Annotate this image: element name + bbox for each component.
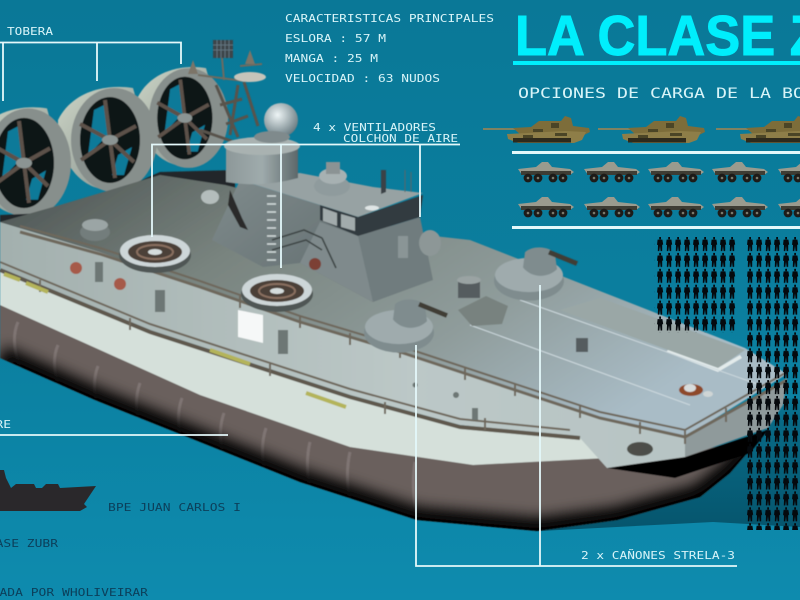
- white hull panel: [238, 310, 263, 343]
- callout: ventiladores: COLCHON DE AIRE: [343, 132, 458, 145]
- cargo: APC rows: [518, 162, 800, 217]
- deck air vents: [119, 235, 191, 273]
- upper drum: [226, 148, 298, 184]
- bridge body: [355, 217, 433, 302]
- bridge windows: [320, 195, 423, 236]
- raised bow deck panel: [560, 298, 745, 368]
- title underline: [513, 61, 800, 65]
- tower block side: [212, 180, 373, 302]
- label: BPE Juan Carlos I: BPE JUAN CARLOS I: [108, 501, 241, 514]
- main characteristics text: CARACTERISTICAS PRINCIPALES: [285, 12, 494, 25]
- deck marking lines: [470, 300, 760, 405]
- drum collar: [224, 137, 300, 155]
- ship shadow on water: [480, 395, 800, 531]
- radar dome: [264, 103, 298, 137]
- hull hatches and details: [70, 262, 478, 420]
- small rear cylinders: [80, 190, 219, 241]
- superstructure: [212, 103, 441, 302]
- callout: cañones: [416, 285, 737, 566]
- callout: ventiladores: 4 x VENTILADORES: [313, 121, 436, 134]
- callout: tobera: TOBERA: [7, 25, 53, 38]
- deck cylinder: [576, 338, 588, 352]
- forward turrets: [364, 299, 447, 353]
- bridge top plate: [240, 173, 423, 217]
- vent behind bridge: [419, 230, 441, 256]
- cargo: tanks row: [483, 116, 800, 143]
- soldiers silhouettes: [654, 237, 800, 530]
- main characteristics text: ESLORA : 57 M: [285, 32, 386, 45]
- callout: ventiladores: [152, 121, 460, 268]
- yellow tubes on hull: [4, 274, 346, 407]
- bridge side box: [398, 236, 408, 258]
- lower white band: [0, 268, 607, 465]
- mast and radar: [188, 40, 266, 144]
- dark rear deck: [0, 170, 235, 290]
- life raft: [679, 384, 713, 397]
- callout: cañones: 2 x CAÑONES STRELA-3: [581, 549, 735, 562]
- cargo heading: OPCIONES DE CARGA DE LA BODEGA: [518, 86, 800, 102]
- skirt lower shading: [0, 358, 770, 531]
- main deck: [0, 175, 787, 437]
- bow black underside: [607, 430, 768, 478]
- hull bow face: [685, 378, 787, 457]
- lift fans: [0, 67, 228, 218]
- skirt: [0, 304, 746, 532]
- hull side: [0, 222, 685, 468]
- railings: [0, 226, 787, 444]
- callout: tobera: [0, 25, 181, 101]
- stair: [272, 230, 336, 268]
- size comparison ship silhouette: [0, 470, 96, 511]
- deck launcher: [457, 276, 508, 326]
- tower scorch: [228, 190, 248, 230]
- skirt ribs: [14, 322, 417, 518]
- roof cylinder: [314, 176, 350, 196]
- main characteristics text: [285, 12, 494, 85]
- hull scorch mark: [627, 442, 653, 456]
- main characteristics text: MANGA : 25 M: [285, 52, 378, 65]
- tower ladder: [267, 196, 276, 260]
- roof antenna: [381, 170, 386, 194]
- main characteristics text: VELOCIDAD : 63 NUDOS: [285, 72, 440, 85]
- red emblem: [309, 258, 321, 270]
